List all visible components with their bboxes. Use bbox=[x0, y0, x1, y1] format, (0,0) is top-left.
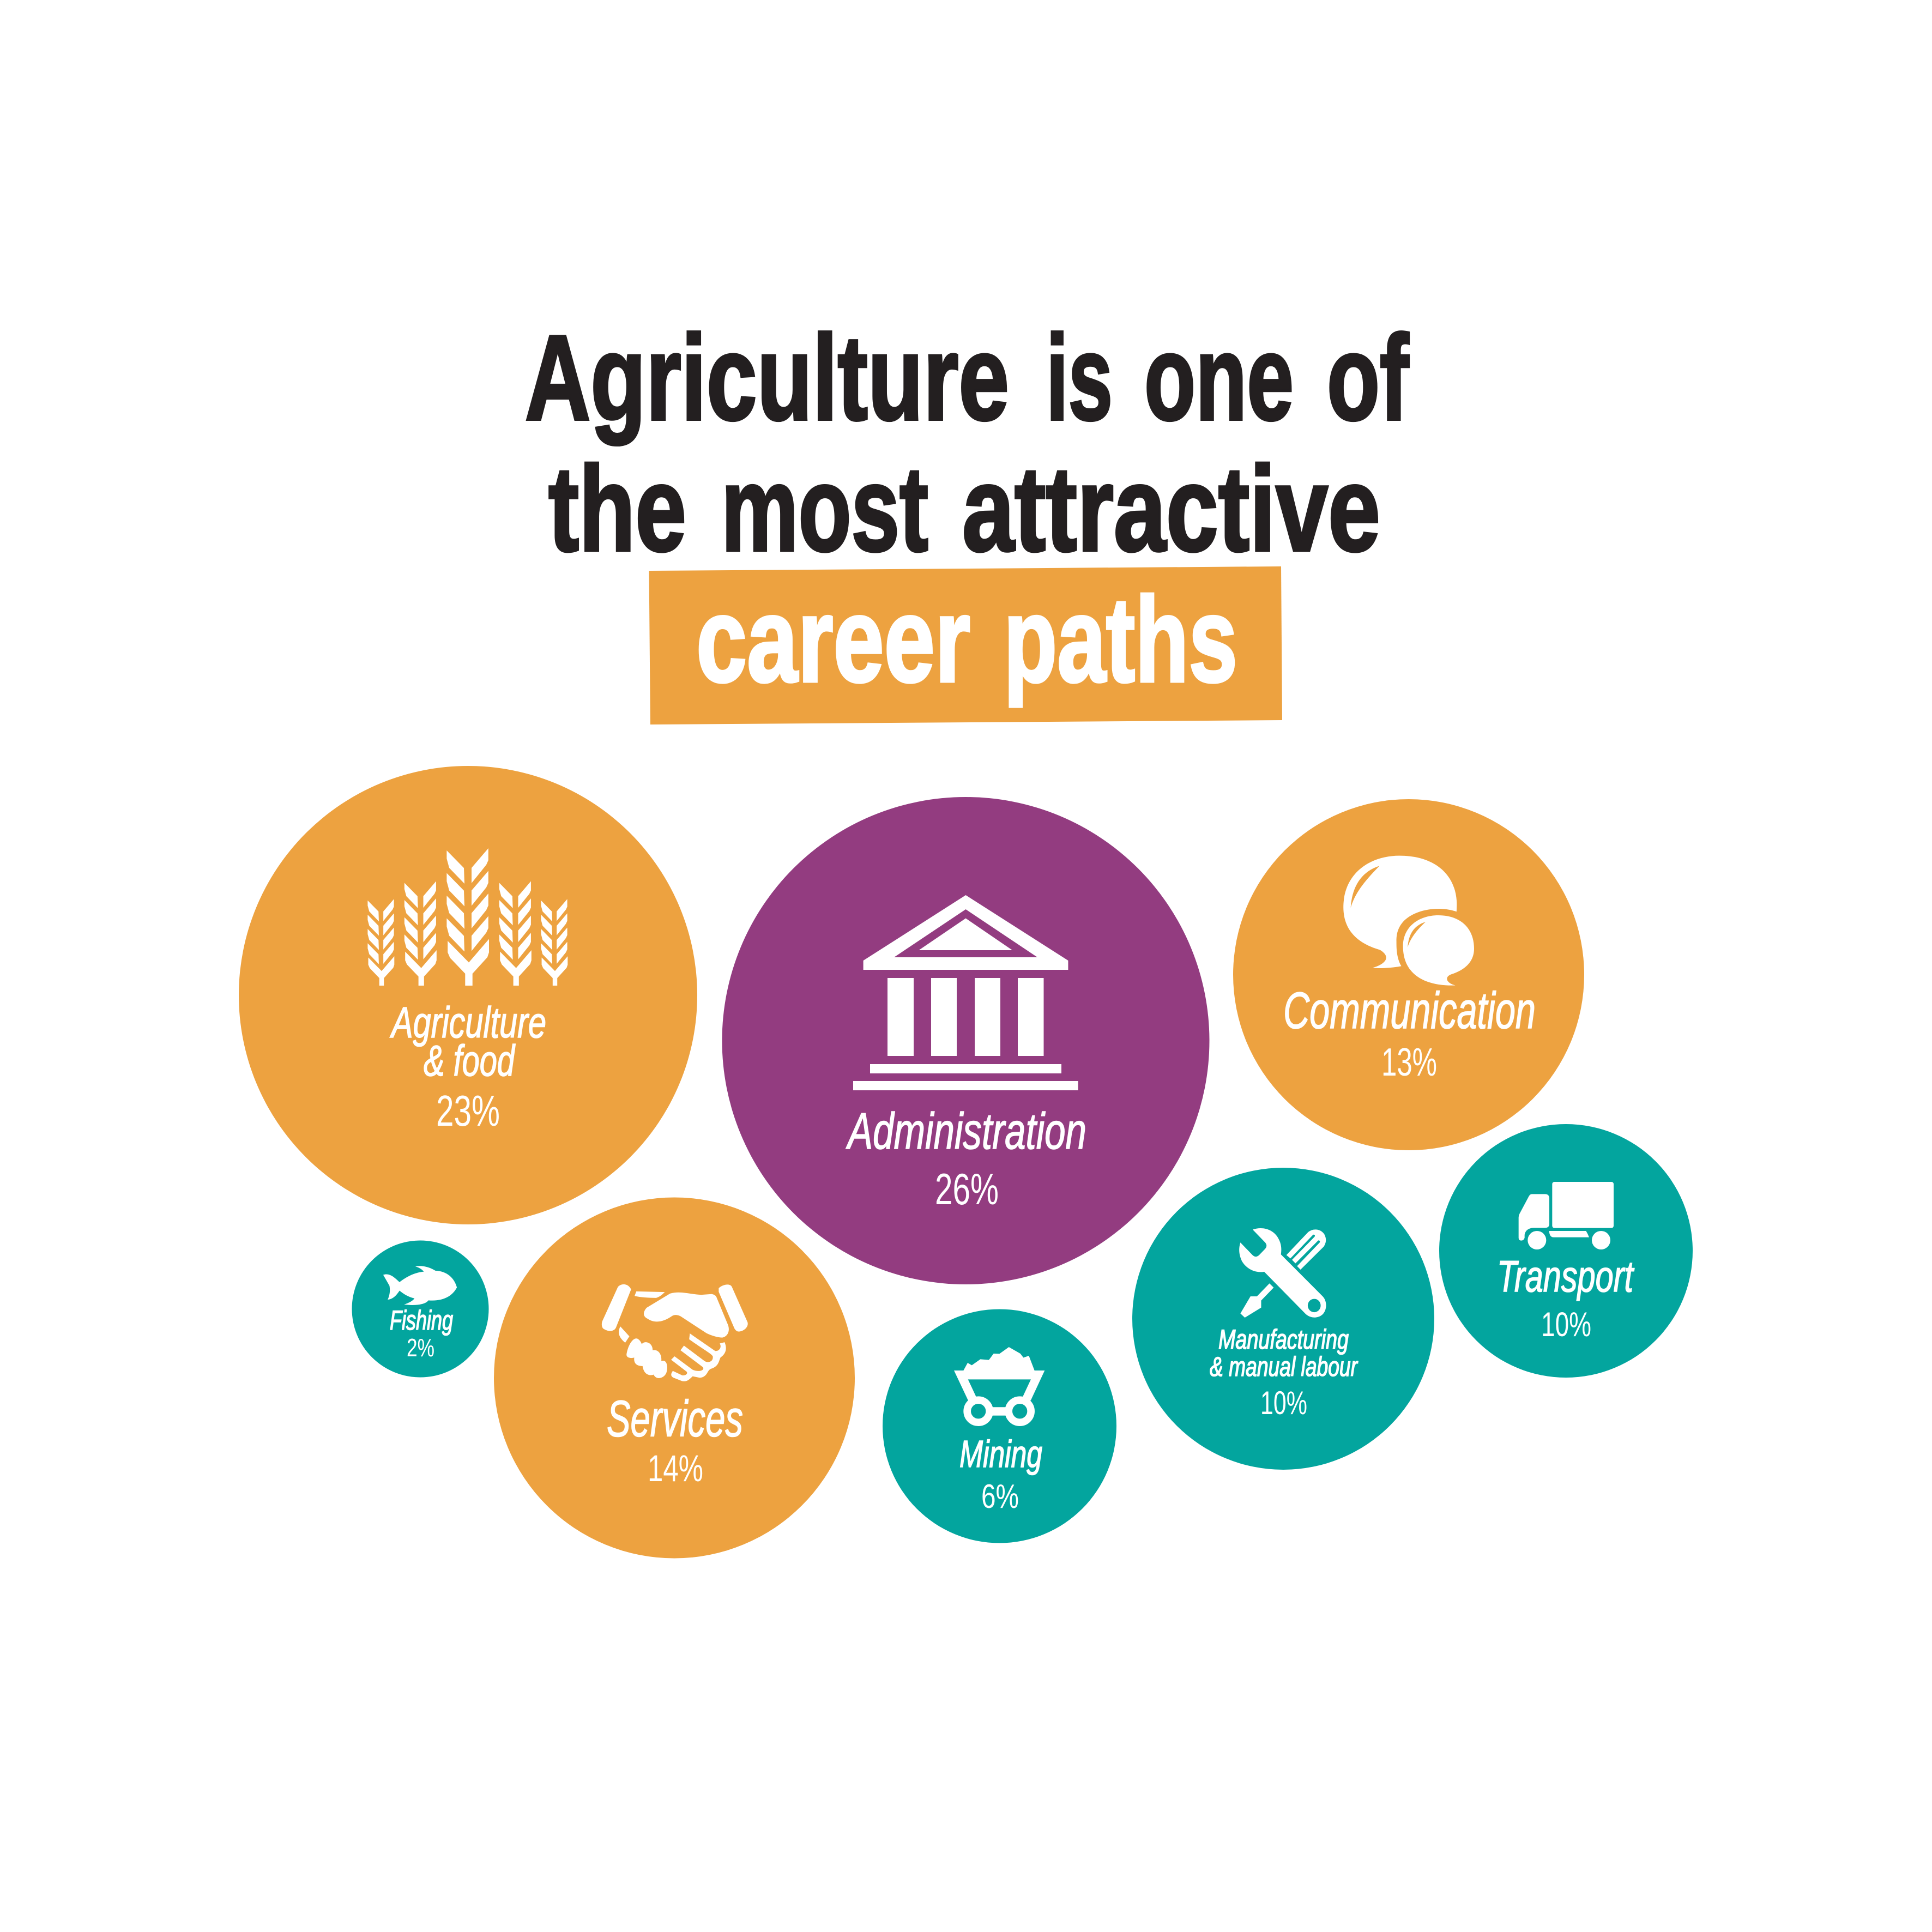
icon: fish bbox=[383, 1266, 457, 1305]
panel: fishing bbox=[352, 1241, 488, 1377]
circle bbox=[1439, 1124, 1693, 1378]
panel: communication bbox=[1233, 799, 1584, 1150]
icon: bank bbox=[853, 895, 1078, 1090]
icon: wrench and screwdriver bbox=[1239, 1228, 1326, 1318]
panel: administration bbox=[722, 797, 1209, 1284]
value: 10% bbox=[1260, 1385, 1307, 1421]
title line 1: is bbox=[1046, 311, 1113, 446]
label bbox=[390, 998, 546, 1085]
icon: truck bbox=[1519, 1182, 1614, 1249]
label bbox=[1210, 1324, 1359, 1382]
label: Mining bbox=[959, 1433, 1042, 1475]
icon: speech bubbles bbox=[1343, 856, 1474, 986]
circle bbox=[1132, 1168, 1434, 1470]
title line 3: career bbox=[696, 572, 970, 708]
circle bbox=[883, 1309, 1116, 1543]
icon: mine cart bbox=[954, 1347, 1045, 1422]
value: 14% bbox=[648, 1447, 703, 1489]
icon: handshake bbox=[602, 1284, 748, 1381]
value: 13% bbox=[1381, 1041, 1437, 1084]
title line 2 bbox=[548, 442, 1380, 577]
title line 2: most bbox=[721, 442, 928, 577]
panel: mining bbox=[883, 1309, 1116, 1543]
circle bbox=[352, 1241, 488, 1377]
circle bbox=[239, 766, 697, 1224]
title line 1: Agriculture bbox=[525, 311, 1009, 446]
value: 26% bbox=[935, 1165, 999, 1214]
label: Administration bbox=[846, 1102, 1086, 1160]
title bbox=[525, 311, 1409, 724]
value: 23% bbox=[436, 1086, 500, 1135]
value: 10% bbox=[1541, 1306, 1591, 1344]
panel: transport bbox=[1439, 1124, 1693, 1378]
title line 1: one bbox=[1144, 311, 1294, 446]
icon: wheat bbox=[367, 848, 567, 986]
label: Agriculture bbox=[390, 998, 546, 1047]
circle bbox=[722, 797, 1209, 1284]
label: & food bbox=[424, 1036, 516, 1085]
panel: agriculture and food bbox=[239, 766, 697, 1224]
title line 2: attractive bbox=[962, 442, 1380, 577]
label: Communication bbox=[1283, 982, 1536, 1040]
panel: manufacturing and manual labour bbox=[1132, 1168, 1434, 1470]
label: & manual labour bbox=[1210, 1351, 1359, 1382]
label: Fishing bbox=[390, 1305, 453, 1336]
label: Services bbox=[607, 1390, 743, 1447]
title line 3 bbox=[696, 572, 1237, 708]
value: 2% bbox=[407, 1333, 434, 1362]
circle bbox=[1233, 799, 1584, 1150]
title line 3: paths bbox=[1004, 572, 1237, 708]
title line 2: the bbox=[548, 442, 686, 577]
circle bbox=[494, 1197, 855, 1558]
panel: services bbox=[494, 1197, 855, 1558]
value: 6% bbox=[981, 1478, 1019, 1516]
label: Transport bbox=[1497, 1252, 1635, 1301]
label: Manufacturing bbox=[1218, 1324, 1349, 1355]
title line 1: of bbox=[1327, 311, 1409, 446]
highlight box bbox=[649, 566, 1282, 724]
